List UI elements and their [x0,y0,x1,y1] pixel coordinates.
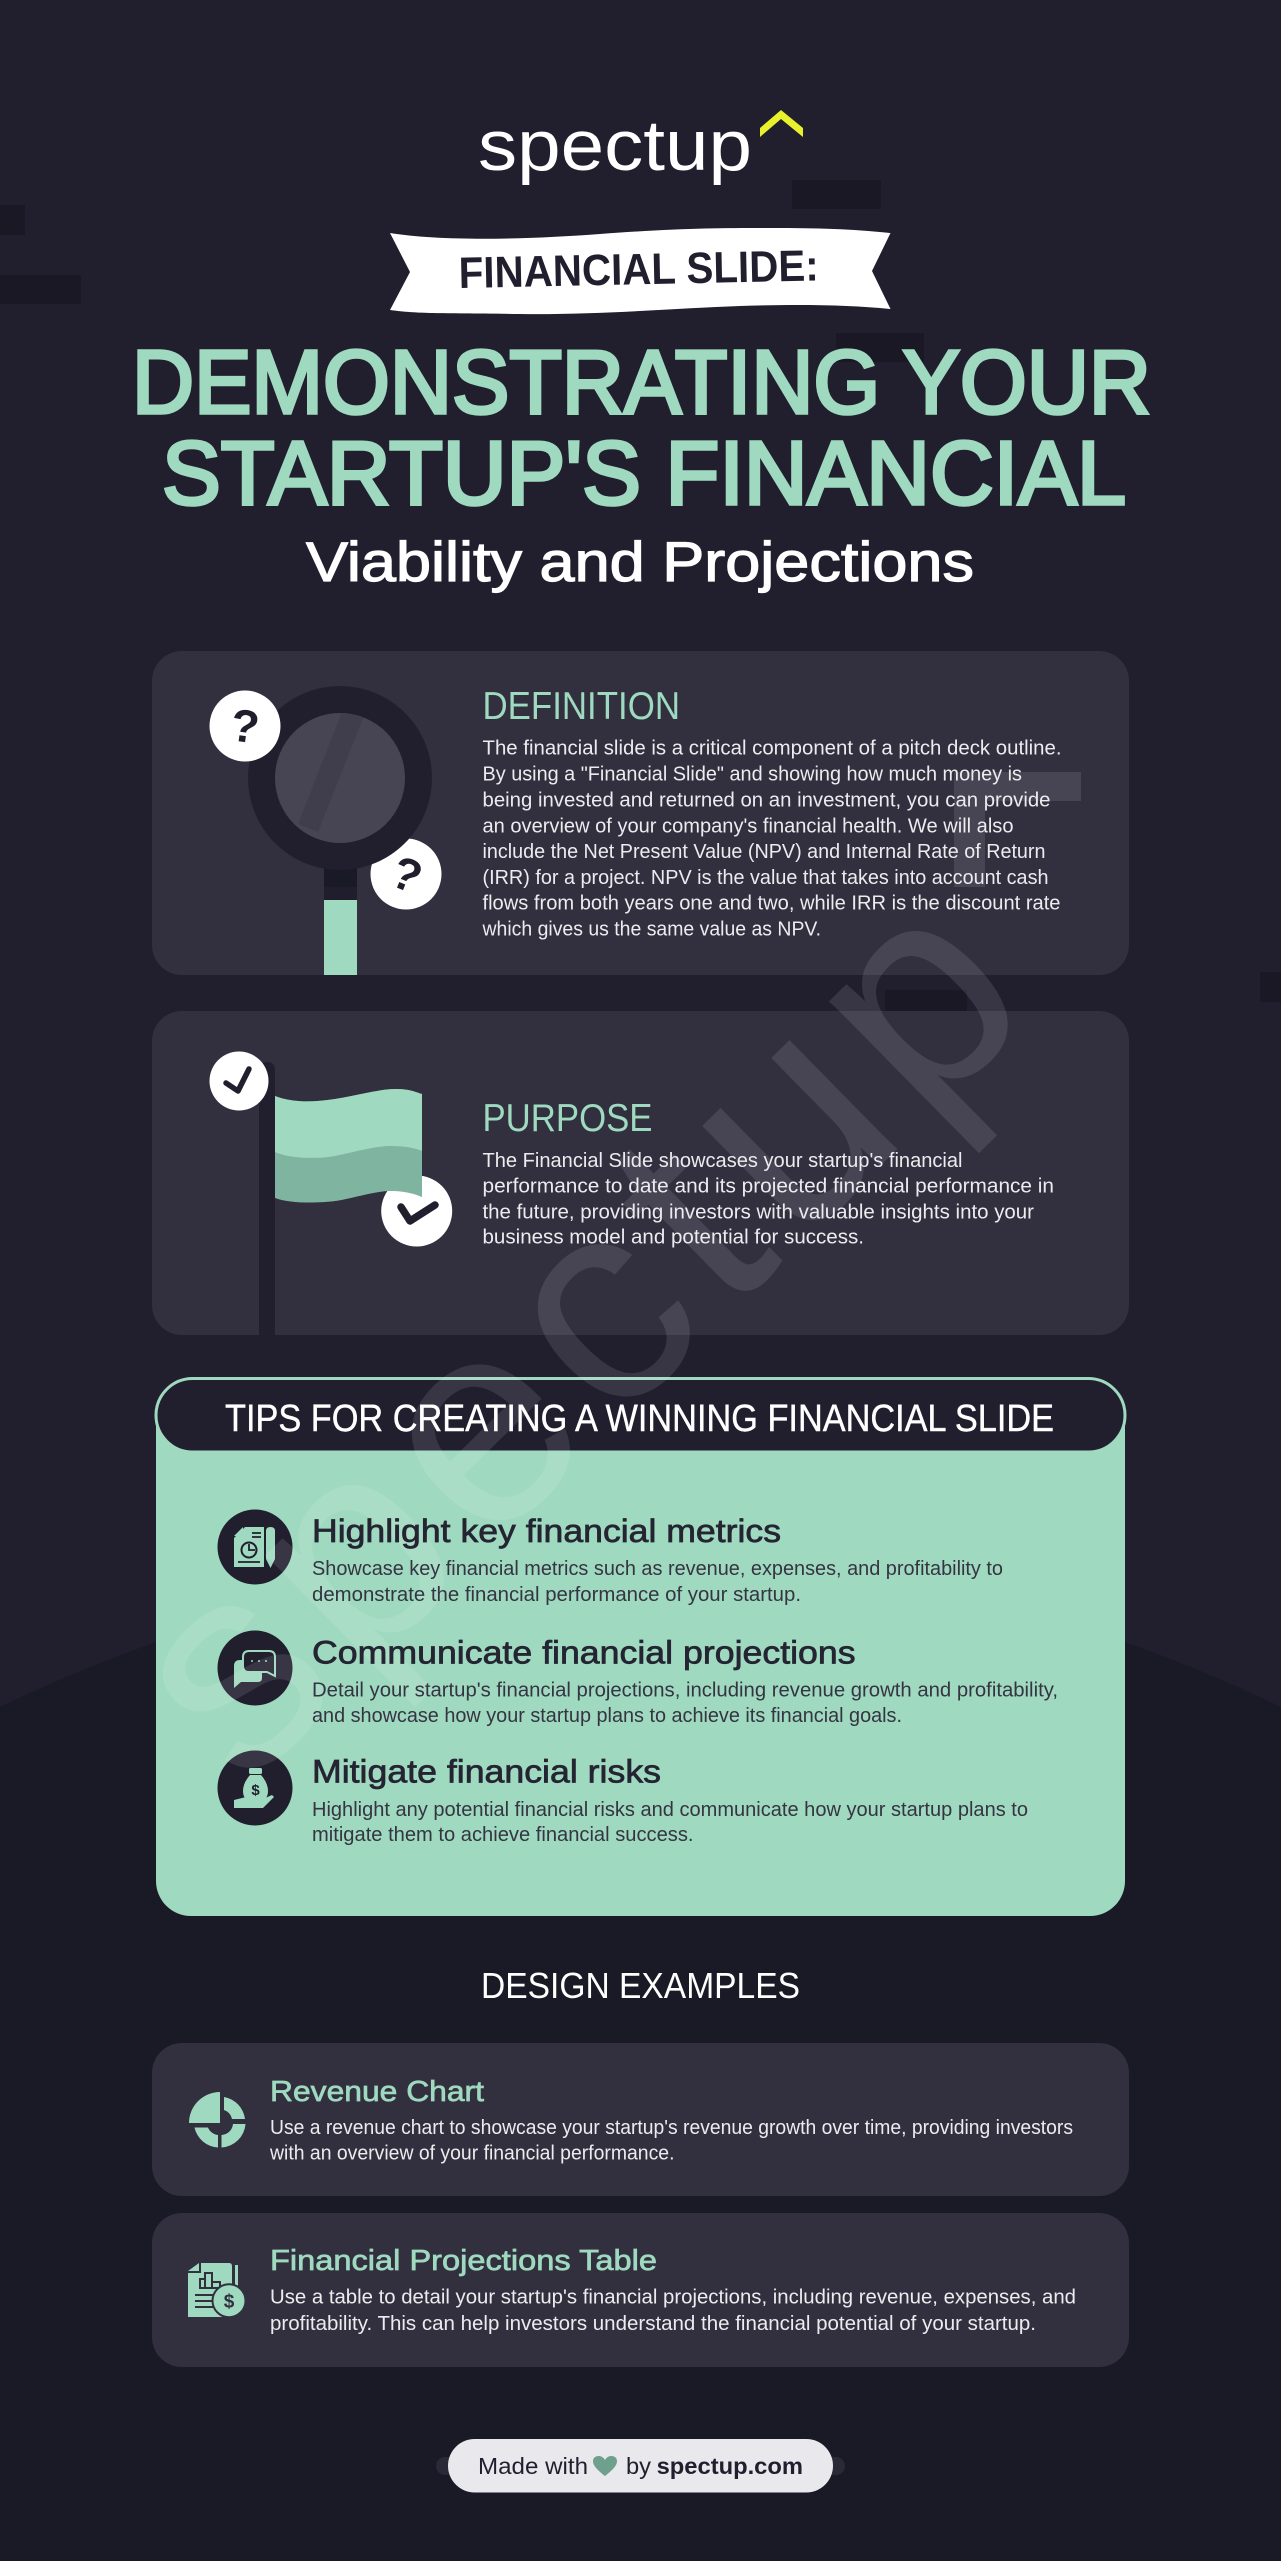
text: financial projections table: Use a table to detail your startup's financial projections, including revenue, expenses, and [270,2287,1076,2309]
title [132,333,1151,524]
icon: financial document: $ [224,2292,235,2312]
panel: tips [156,1378,1125,1916]
heading: tips: TIPS FOR CREATING A WINNING FINANCIAL SLIDE [225,1398,1054,1440]
heading: design examples: DESIGN EXAMPLES [481,1965,800,2006]
tip: mitigate financial risks [312,1754,1028,1846]
tip: mitigate financial risks: mitigate them to achieve financial success. [312,1824,694,1846]
body: purpose [482,1149,1054,1249]
icon: money bag in hand: $ [251,1782,260,1799]
footer badge: by [626,2453,652,2479]
tip: highlight key financial metrics: Showcase key financial metrics such as revenue, expenses, and profitability to [312,1558,1003,1580]
text: revenue chart: with an overview of your financial performance. [269,2143,674,2165]
text: financial projections table: profitability. This can help investors understand the financial potential of your startup. [270,2313,1036,2335]
icon: money bag in hand [218,1750,292,1826]
title: STARTUP'S FINANCIAL [162,424,1126,524]
text: definition [482,685,1062,940]
footer badge: spectup.com [657,2453,803,2479]
tip: highlight key financial metrics: Highlight key financial metrics [312,1513,781,1549]
body: purpose: the future, providing investors with valuable insights into your [482,1201,1034,1224]
watermark: spectup: spectup [60,824,1082,1836]
subtitle: Viability and Projections [306,530,974,593]
body: definition: The financial slide is a critical component of a pitch deck outline. [482,737,1062,760]
text: financial projections table [270,2245,1076,2335]
body: definition: include the Net Present Value (NPV) and Internal Rate of Return [482,840,1046,863]
tip: mitigate financial risks: Mitigate financial risks [312,1754,661,1790]
tip: communicate financial projections: Communicate financial projections [312,1635,856,1671]
panel: purpose [152,1011,1129,1335]
panel: revenue chart [152,2043,1129,2196]
body: definition: (IRR) for a project. NPV is the value that takes into account cash [482,866,1048,889]
text: revenue chart [269,2076,1073,2165]
tip: communicate financial projections: and showcase how your startup plans to achieve its financial goals. [312,1705,902,1727]
icon: magnifying glass: ? [384,845,430,904]
icon: financial document [188,2263,246,2317]
footer badge: Made with [478,2453,588,2479]
icon: magnifying glass: ? [227,698,263,754]
body: purpose: business model and potential for success. [482,1226,864,1249]
body: definition: an overview of your company's financial health. We will also [482,814,1014,837]
body: purpose: The Financial Slide showcases your startup's financial [482,1149,962,1172]
title: DEMONSTRATING YOUR [132,333,1151,433]
tip: communicate financial projections [312,1635,1058,1727]
banner: financial slide: FINANCIAL SLIDE: [458,241,819,298]
heading: definition: DEFINITION [482,685,680,728]
logo: spectup: spectup [478,107,752,186]
body: definition: being invested and returned on an investment, you can provide [482,788,1050,812]
icon: flag with checks [210,1052,452,1335]
body: purpose: performance to date and its projected financial performance in [482,1175,1054,1198]
body: definition: flows from both years one and two, while IRR is the discount rate [482,892,1060,915]
footer badge [436,2439,845,2492]
text: revenue chart: Use a revenue chart to showcase your startup's revenue growth over time, providing investors [270,2117,1073,2139]
text: financial projections table: Financial Projections Table [270,2245,657,2277]
icon: pie chart [189,2092,246,2148]
body: definition [482,737,1062,940]
banner: financial slide [390,228,890,314]
tip: communicate financial projections: Detail your startup's financial projections, including revenue growth and profitability, [312,1679,1058,1701]
icon: chat bubbles [218,1630,292,1706]
text: purpose [482,1097,1054,1249]
icon: magnifying glass [210,686,442,975]
icon: report [218,1510,292,1584]
panel: definition [152,651,1129,975]
body: definition: which gives us the same value as NPV. [482,918,821,940]
panel: financial projections table [152,2213,1129,2367]
icon: heart [593,2456,617,2476]
tip: highlight key financial metrics: demonstrate the financial performance of your startup. [312,1584,801,1606]
text: revenue chart: Revenue Chart [270,2076,484,2108]
tip: mitigate financial risks: Highlight any potential financial risks and communicate how your startup plans to [312,1799,1028,1821]
body: definition: By using a "Financial Slide" and showing how much money is [482,763,1022,786]
tip: highlight key financial metrics [312,1513,1003,1606]
heading: purpose: PURPOSE [482,1097,652,1140]
